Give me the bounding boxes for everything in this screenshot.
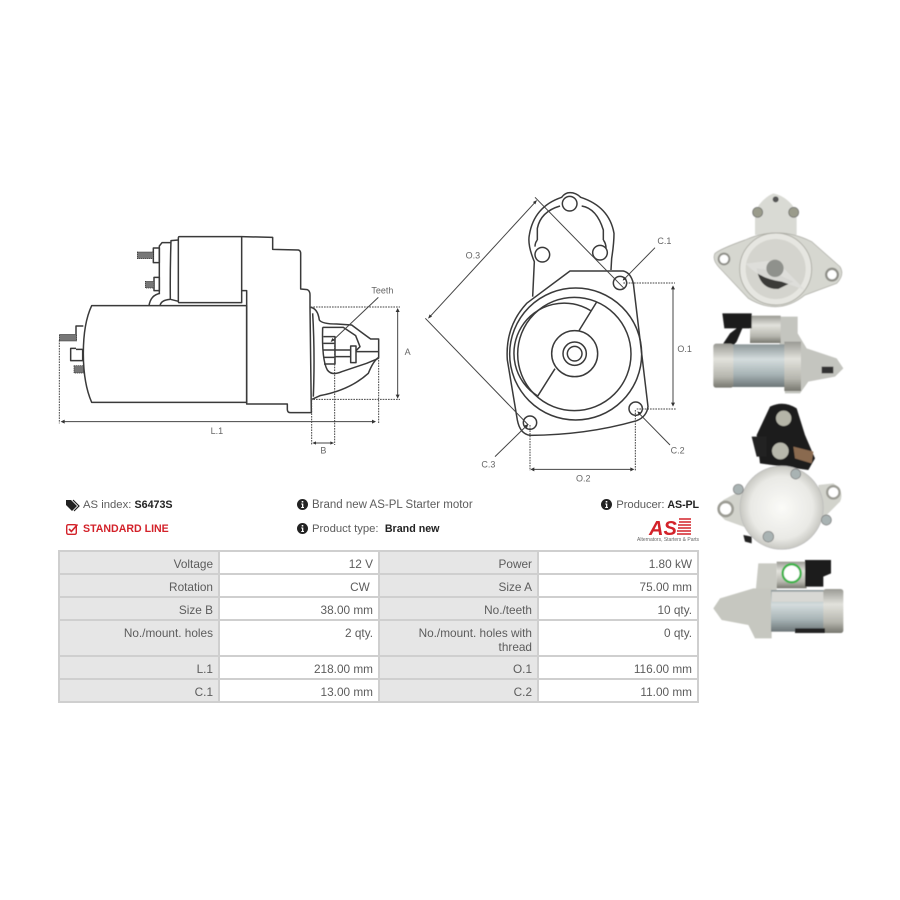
row: voltage and power: Voltage: [174, 557, 213, 571]
row: L.1 and O.1: 116.00 mm: [634, 662, 692, 676]
callouts C.1 C.2 C.3: C.2: [671, 446, 685, 456]
row: mounting holes: [60, 621, 697, 655]
row: size B and teeth: Size B: [179, 603, 213, 617]
dimension L.1: [59, 340, 379, 436]
photos: starter motor views 3 and 4: [713, 402, 844, 639]
pinion nose: [311, 307, 379, 399]
row: C.1 and C.2: C.2: [514, 685, 532, 699]
photo: rear of starter: [717, 404, 842, 549]
front view technical drawing: [425, 192, 692, 484]
row: size B and teeth: 38.00 mm: [321, 603, 373, 617]
row: voltage and power: 1.80 kW: [649, 557, 692, 571]
row: L.1 and O.1: 218.00 mm: [314, 662, 373, 676]
dimension L.1: L.1: [211, 426, 223, 436]
photo: front of starter: [714, 193, 842, 307]
motor body outline: [83, 293, 247, 402]
callouts C.1 C.2 C.3: C.1: [657, 236, 671, 246]
dimension O.1: O.1: [677, 344, 692, 354]
rear terminals: [59, 326, 83, 373]
dimension A: A: [405, 347, 411, 357]
dimension O.3: [425, 197, 624, 425]
teeth callout: Teeth: [371, 286, 393, 296]
specification table: [58, 550, 699, 703]
row: rotation and size A: 75.00 mm: [640, 580, 692, 594]
side view technical drawing: [58, 236, 411, 456]
row: mounting holes: 0 qty.: [664, 626, 692, 640]
icon: info: [297, 499, 308, 510]
mounting holes: [523, 276, 642, 429]
row: C.1 and C.2: [60, 680, 697, 701]
row: C.1 and C.2: 13.00 mm: [321, 685, 373, 699]
logo: AS: [637, 518, 700, 543]
row: mounting holes: No./mount. holes: [124, 626, 213, 640]
upper mounting lug: [529, 193, 614, 297]
icon: tags: [66, 500, 80, 512]
row: size B and teeth: 10 qty.: [657, 603, 692, 617]
info row: standard line: STANDARD LINE: [83, 523, 169, 535]
dimension O.2: O.2: [576, 474, 591, 484]
callouts C.1 C.2 C.3: C.3: [481, 459, 495, 469]
row: C.1 and C.2: C.1: [195, 685, 213, 699]
row: voltage and power: [60, 552, 697, 573]
drive housing: [242, 237, 311, 413]
concentric rings and shaft: [510, 288, 642, 420]
photos: starter motor views 1 and 2: [712, 193, 844, 394]
row: L.1 and O.1: [60, 657, 697, 678]
row: mounting holes: 2 qty.: [345, 626, 373, 640]
row: mounting holes: thread: [499, 640, 532, 654]
icon: info: [601, 499, 612, 510]
dimension O.1: [623, 283, 692, 409]
info row: product type: Product type: Brand new: [312, 523, 439, 535]
row: rotation and size A: Rotation: [169, 580, 213, 594]
dimension A: [311, 307, 411, 399]
row: voltage and power: Power: [499, 557, 532, 571]
row: mounting holes: No./mount. holes with: [419, 626, 532, 640]
row: rotation and size A: [60, 575, 697, 596]
dimension B: B: [320, 446, 326, 456]
photo: left-facing side view: [713, 560, 843, 638]
callouts C.1 C.2 C.3: [481, 236, 685, 469]
teeth callout: [331, 286, 393, 342]
icon: info: [297, 523, 308, 534]
dimension O.3: O.3: [466, 250, 480, 260]
logo: AS: Alternators, Starters & Parts: [637, 537, 700, 543]
info row: producer: Producer: AS-PL: [616, 499, 699, 511]
info row: description: Brand new AS-PL Starter motor: [312, 499, 473, 511]
logo: AS: AS: [648, 518, 677, 540]
row: size B and teeth: [60, 598, 697, 619]
mounting flange: [507, 271, 648, 435]
row: C.1 and C.2: 11.00 mm: [640, 685, 692, 699]
dimension O.2: [530, 410, 635, 484]
row: voltage and power: 12 V: [349, 557, 373, 571]
photo: right-facing side view: [713, 313, 843, 393]
info row: AS index: AS index: S6473S: [83, 499, 173, 511]
dimension B: [312, 340, 335, 456]
row: size B and teeth: No./teeth: [484, 603, 532, 617]
row: L.1 and O.1: L.1: [197, 662, 213, 676]
row: rotation and size A: CW: [350, 580, 370, 594]
row: L.1 and O.1: O.1: [513, 662, 532, 676]
icon: checked box: [66, 524, 78, 535]
solenoid terminals: [137, 252, 154, 288]
row: rotation and size A: Size A: [499, 580, 532, 594]
solenoid: [153, 237, 242, 303]
